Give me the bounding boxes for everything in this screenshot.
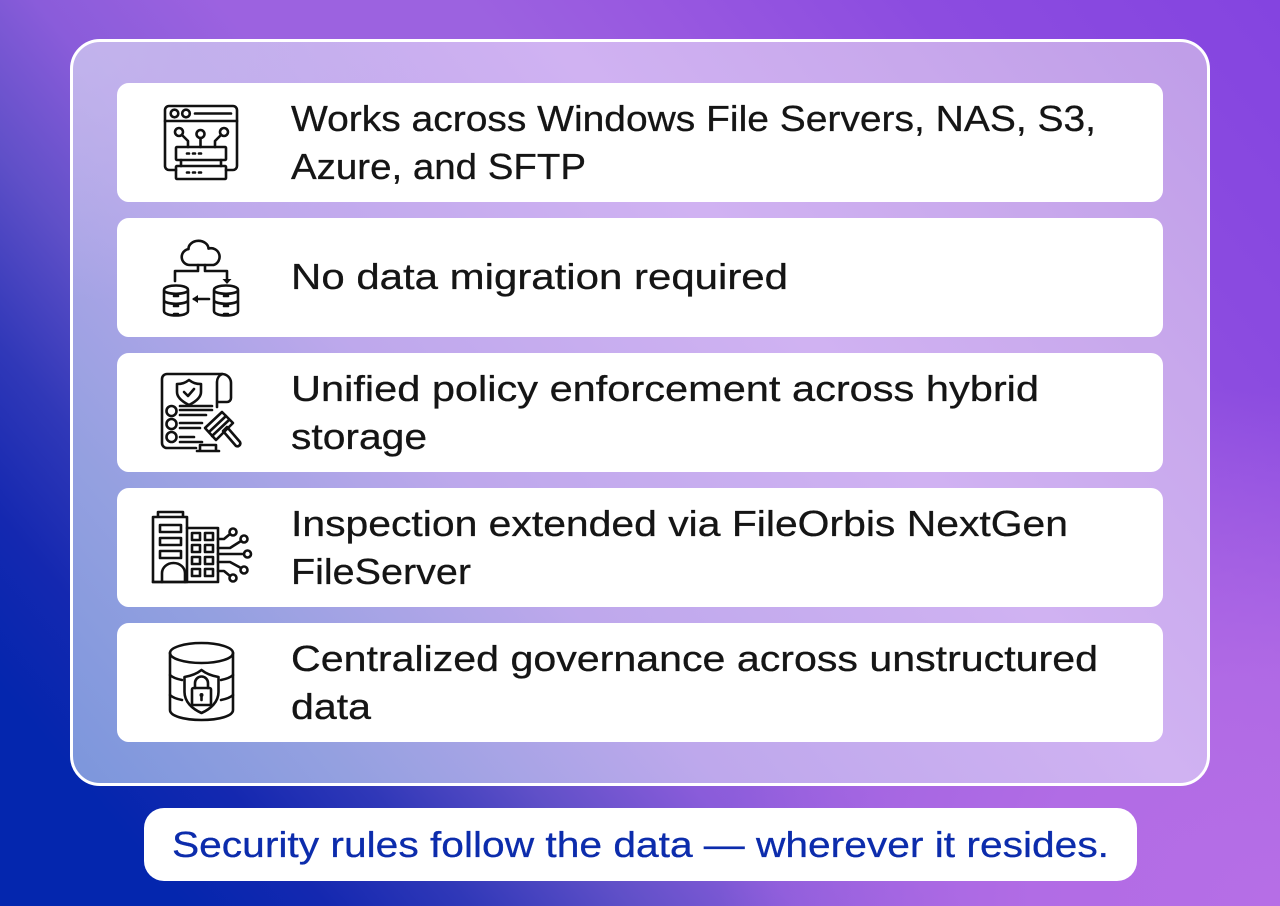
icon: cloud with two databases bbox=[164, 241, 238, 316]
text: inspection extended: Inspection extended via FileOrbis NextGen bbox=[291, 503, 1068, 544]
text: centralized governance: data bbox=[291, 686, 372, 727]
text: unified policy: Unified policy enforcement across hybrid bbox=[291, 368, 1039, 409]
text: centralized governance bbox=[291, 638, 1098, 727]
card: centralized governance bbox=[117, 623, 1163, 742]
text: inspection extended bbox=[291, 503, 1068, 592]
card: inspection extended bbox=[117, 488, 1163, 607]
icon: policy document with gavel bbox=[162, 374, 240, 451]
text: works across: Azure, and SFTP bbox=[291, 146, 586, 187]
footer callout bbox=[144, 808, 1137, 881]
text: centralized governance: Centralized governance across unstructured bbox=[291, 638, 1098, 679]
card: no data migration bbox=[117, 218, 1163, 337]
text: unified policy: storage bbox=[291, 416, 427, 457]
icon: database with shield and lock bbox=[170, 643, 233, 720]
text: works across: Works across Windows File Servers, NAS, S3, bbox=[291, 98, 1096, 139]
card: works across file servers bbox=[117, 83, 1163, 202]
text: works across bbox=[291, 98, 1096, 187]
text: no data migration: No data migration required bbox=[291, 256, 788, 297]
icon: browser window with servers bbox=[165, 106, 237, 179]
text: unified policy bbox=[291, 368, 1039, 457]
footer callout: Security rules follow the data — wherever it resides. bbox=[172, 824, 1109, 865]
text: inspection extended: FileServer bbox=[291, 551, 471, 592]
icon: buildings with circuit lines bbox=[153, 512, 251, 582]
panel: translucent container bbox=[70, 39, 1210, 786]
card: unified policy bbox=[117, 353, 1163, 472]
